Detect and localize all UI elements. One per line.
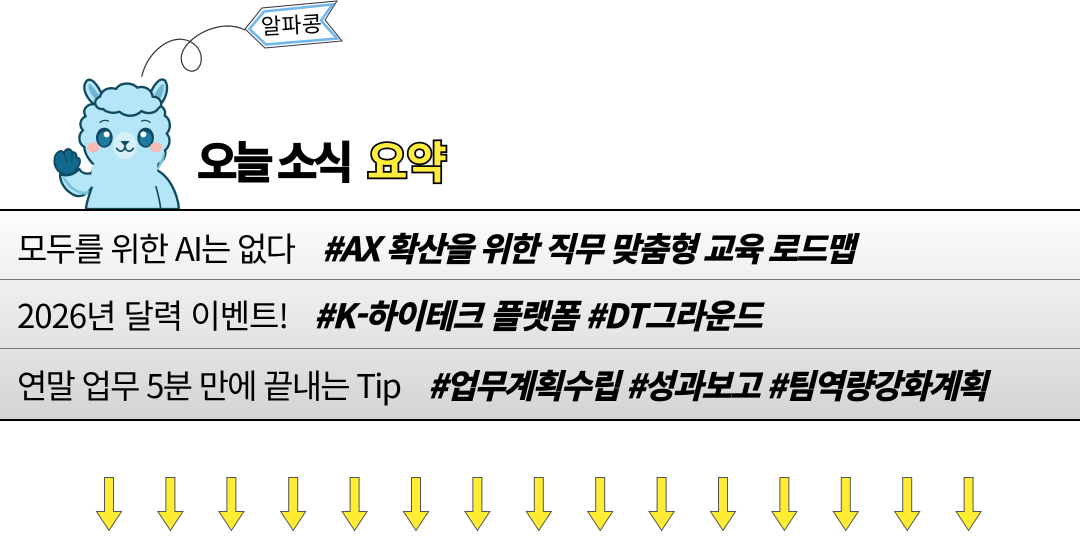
row 1: AI roadmap: 모두를 위한 AI는 없다	[17, 223, 296, 271]
row 2: 2026 calendar event	[17, 290, 765, 338]
fluffy head	[79, 104, 170, 174]
row 3: year-end work tip	[17, 360, 991, 408]
row 2: 2026 calendar event: 2026년 달력 이벤트!	[17, 290, 289, 338]
muzzle	[113, 132, 137, 159]
left ear	[84, 80, 103, 105]
panel: summary list background	[0, 210, 1080, 420]
brows	[100, 120, 150, 122]
heading: 오늘 소식: 소식	[277, 127, 349, 191]
tag: 알파콩 ribbon label	[245, 1, 342, 48]
row 3: year-end work tip: 연말 업무 5분 만에 끝내는 Tip	[17, 360, 402, 408]
waving hand	[54, 149, 80, 175]
body and raised arm	[60, 169, 179, 209]
row 3: year-end work tip: #업무계획수립 #성과보고 #팀역량강화계획	[428, 360, 991, 408]
arrows: row of yellow down arrows	[96, 478, 981, 530]
hair tuft	[95, 84, 161, 116]
icon: curly line from alpaca to label	[142, 26, 245, 77]
nose and mouth	[120, 141, 130, 146]
heading: 오늘 소식: 오늘	[197, 127, 272, 191]
row 1: AI roadmap: #AX 확산을 위한 직무 맞춤형 교육 로드맵	[322, 223, 860, 271]
eyes	[96, 128, 113, 148]
icon: alpaca mascot	[54, 79, 179, 209]
row 1: AI roadmap	[17, 223, 860, 271]
heading highlight: 요약: 요약	[367, 127, 447, 191]
row 2: 2026 calendar event: #K-하이테크 플랫폼 #DT그라운드	[314, 290, 765, 338]
right ear	[149, 79, 167, 106]
cheeks	[87, 142, 99, 152]
tag: 알파콩 ribbon label: 알파콩	[260, 6, 323, 41]
